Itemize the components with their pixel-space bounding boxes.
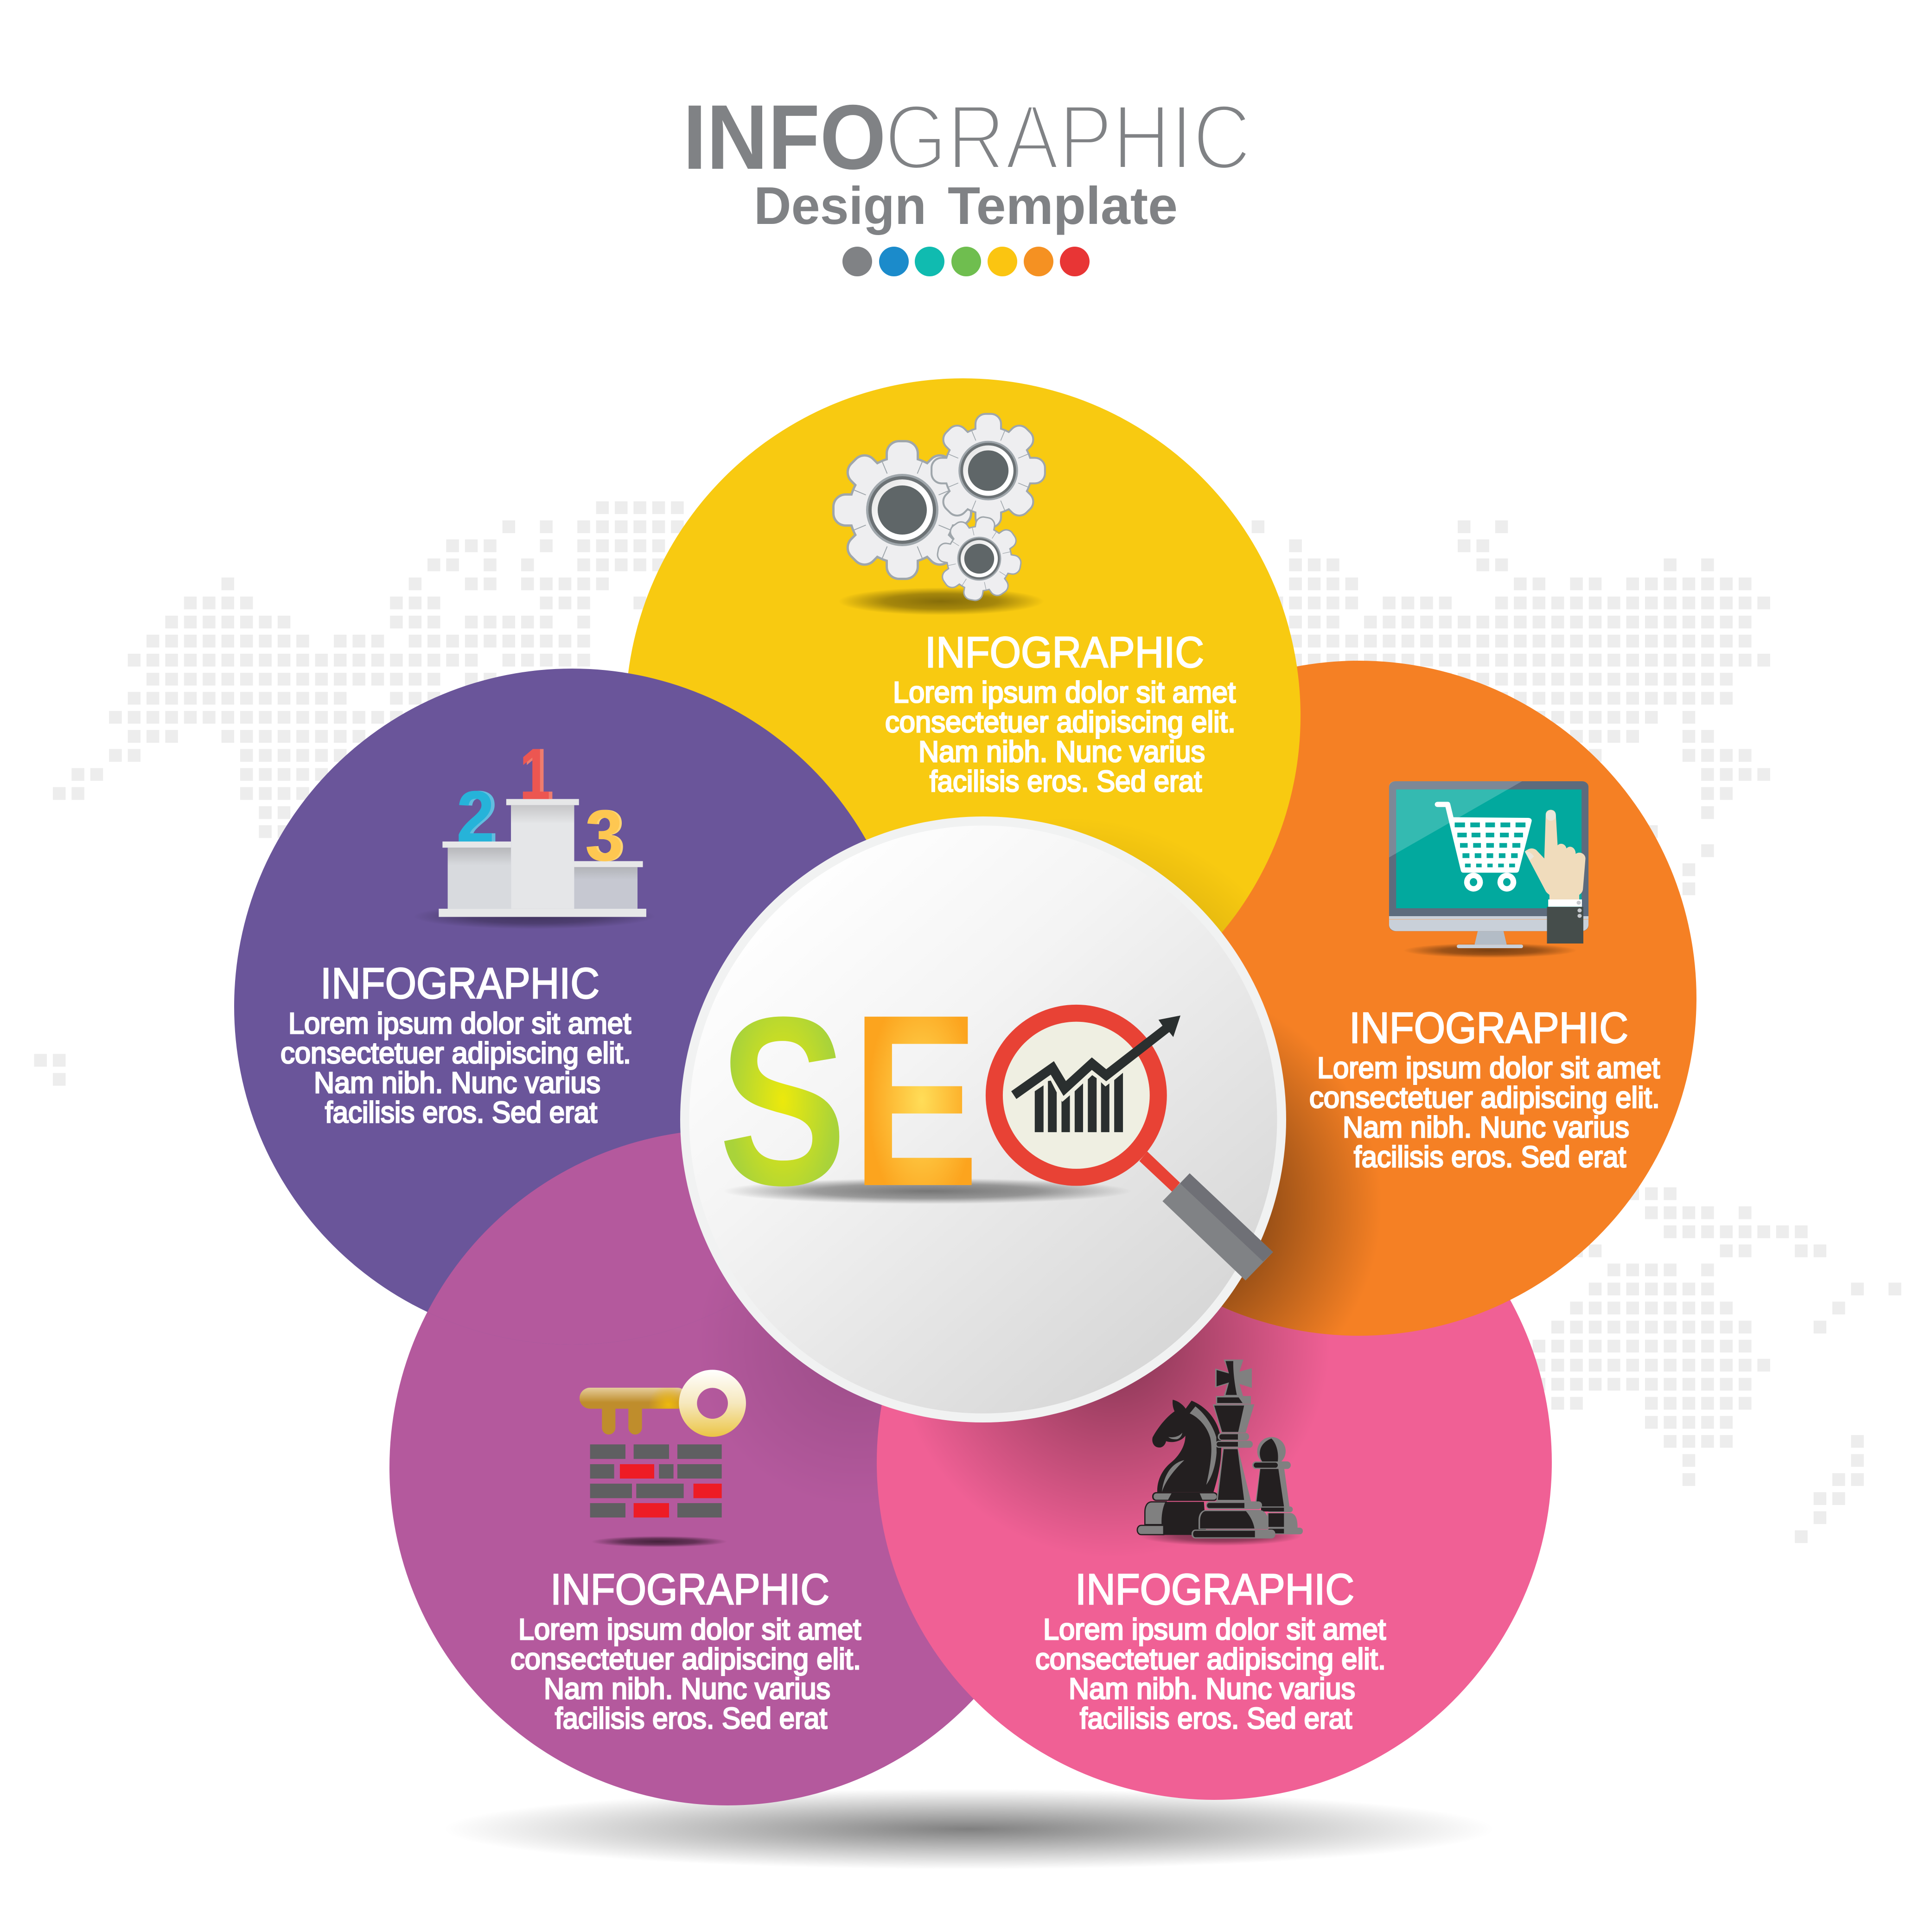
text block: pink panel: consectetuer adipiscing elit. [1035,1642,1386,1676]
icon: key and brick wall [580,1370,746,1547]
title: INFOGRAPHIC: GRAPHIC [885,86,1251,188]
letter S: S [719,967,847,1235]
subtitle: Design Template [754,177,1178,236]
title: INFOGRAPHIC [683,86,1251,188]
text block: pink panel: facilisis eros. Sed erat [1080,1702,1352,1735]
title: INFOGRAPHIC: INFO [683,86,886,188]
ground shadow under diagram [444,1789,1494,1869]
text block: yellow panel: Nam nibh. Nunc varius [918,735,1205,768]
text block: orange panel [1309,1003,1660,1173]
icon: podium with 1 2 3: 1 [523,733,554,815]
text block: pink panel: Lorem ipsum dolor sit amet [1043,1613,1386,1646]
text block: purple panel [281,959,631,1129]
text block: magenta panel: facilisis eros. Sed erat [555,1702,827,1735]
icon: podium with 1 2 3: 2 [460,776,498,857]
text block: orange panel: Lorem ipsum dolor sit amet [1317,1051,1660,1084]
magnifier with growth chart [986,1005,1273,1281]
world map dotted background [34,508,1901,1537]
subtitle: Design Template: Design [754,177,926,236]
text block: orange panel: consectetuer adipiscing elit. [1309,1081,1660,1114]
colour dots row [842,247,1090,276]
icon: podium with 1 2 3 [413,733,656,929]
text block: orange panel: Nam nibh. Nunc varius [1343,1110,1629,1144]
text block: pink panel [1035,1565,1386,1735]
text block: orange panel: INFOGRAPHIC [1349,1003,1628,1052]
text block: purple panel: Nam nibh. Nunc varius [314,1066,600,1099]
icon: podium with 1 2 3: 3 [585,795,623,876]
centre disc: SEO [680,816,1286,1422]
panel: purple podium [234,669,910,1345]
text block: pink panel: Nam nibh. Nunc varius [1069,1672,1355,1705]
text block: orange panel: facilisis eros. Sed erat [1354,1140,1626,1173]
icon: chess pieces [1137,1359,1303,1546]
letter E: E [852,964,979,1237]
text block: magenta panel: consectetuer adipiscing elit. [510,1642,861,1676]
subtitle: Design Template: Template [948,177,1178,236]
icon: podium with 1 2 3: 2 [456,776,495,857]
panel: pink chess [877,1125,1552,1800]
text block: yellow panel: INFOGRAPHIC [925,628,1204,676]
text block: purple panel: consectetuer adipiscing elit. [281,1036,631,1070]
text block: yellow panel [885,628,1236,798]
icon: podium with 1 2 3: 1 [519,733,550,815]
text block: purple panel: Lorem ipsum dolor sit amet [288,1007,631,1040]
panel: yellow gears [625,378,1301,1053]
icon: monitor with cart and hand [1389,781,1588,958]
SEO ground shadow [723,1178,1132,1204]
text block: yellow panel: facilisis eros. Sed erat [930,765,1202,798]
text block: purple panel: facilisis eros. Sed erat [325,1096,597,1129]
text block: purple panel: INFOGRAPHIC [320,959,599,1007]
text block: pink panel: INFOGRAPHIC [1075,1565,1354,1613]
panel: magenta key [389,1129,1065,1805]
text block: magenta panel: Lorem ipsum dolor sit amet [518,1613,861,1646]
text block: magenta panel: Nam nibh. Nunc varius [544,1672,830,1705]
icon: gears [835,415,1044,615]
text block: magenta panel: INFOGRAPHIC [550,1565,829,1613]
text block: yellow panel: Lorem ipsum dolor sit amet [893,676,1236,709]
text block: yellow panel: consectetuer adipiscing elit. [885,705,1236,739]
icon: podium with 1 2 3: 3 [587,795,625,876]
panel: orange shopping [1021,661,1696,1336]
text block: magenta panel [510,1565,861,1735]
